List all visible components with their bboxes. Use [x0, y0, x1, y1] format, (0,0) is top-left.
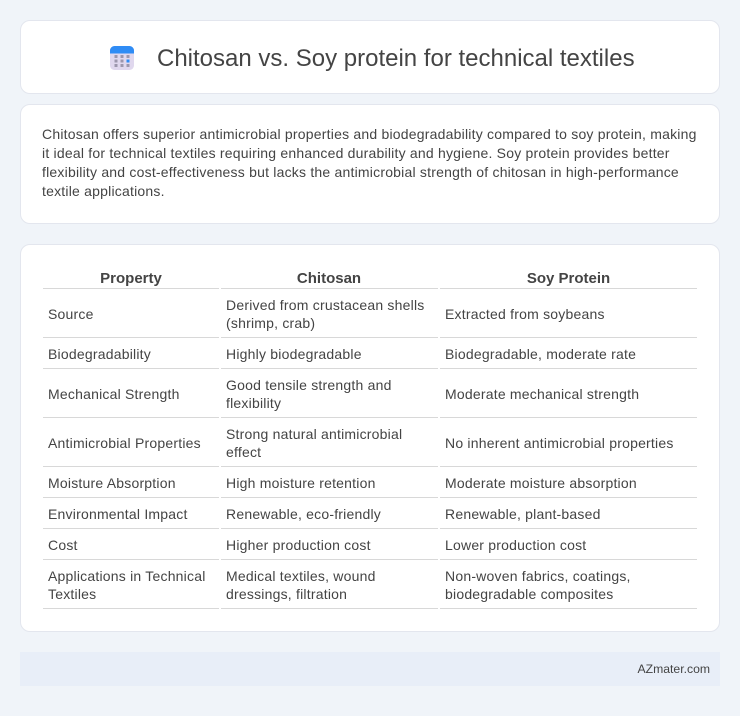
row: Applications in Technical Textiles [48, 568, 631, 602]
summary text: Chitosan offers superior antimicrobial properties and biodegradability compared to soy protein, making [42, 126, 697, 142]
row: Mechanical Strength [48, 377, 639, 411]
row: Applications in Technical Textiles: Medical textiles, wound [226, 568, 376, 584]
row: Environmental Impact [48, 506, 601, 522]
row: Biodegradability: Highly biodegradable [226, 346, 362, 362]
row: Biodegradability: Biodegradability [48, 346, 151, 362]
icon: calendar [110, 46, 134, 70]
row: Moisture Absorption: Moderate moisture absorption [445, 475, 637, 491]
row: Applications in Technical Textiles: Textiles [48, 586, 96, 602]
row: Applications in Technical Textiles: Non-woven fabrics, coatings, [445, 568, 631, 584]
title: Chitosan vs. Soy protein for technical textiles [157, 45, 635, 72]
footer text: AZmater.com [638, 662, 710, 676]
row: Moisture Absorption: Moisture Absorption [48, 475, 176, 491]
row: Antimicrobial Properties [48, 426, 674, 460]
row: Biodegradability: Biodegradable, moderate rate [445, 346, 636, 362]
footer bar [20, 652, 720, 686]
row: Environmental Impact: Renewable, eco-friendly [226, 506, 381, 522]
row: Antimicrobial Properties: Strong natural antimicrobial [226, 426, 402, 442]
panel: title card [20, 20, 720, 94]
comparison table [43, 270, 697, 609]
row: Cost: Higher production cost [226, 537, 371, 553]
row: Antimicrobial Properties: No inherent antimicrobial properties [445, 435, 674, 451]
row: Cost: Lower production cost [445, 537, 586, 553]
row: Applications in Technical Textiles: Applications in Technical [48, 568, 206, 584]
row: Cost: Cost [48, 537, 78, 553]
row: Antimicrobial Properties: Antimicrobial Properties [48, 435, 201, 451]
row: Moisture Absorption [48, 475, 637, 491]
column header: Soy Protein: Soy Protein [527, 270, 610, 287]
row: Antimicrobial Properties: effect [226, 444, 261, 460]
row: Source: Source [48, 306, 94, 322]
row: Source: (shrimp, crab) [226, 315, 315, 331]
row: Source [48, 297, 605, 331]
column header: Chitosan: Chitosan [297, 270, 361, 287]
row: Applications in Technical Textiles: dressings, filtration [226, 586, 347, 602]
row: Mechanical Strength: Good tensile strength and [226, 377, 392, 393]
row: Biodegradability [48, 346, 636, 362]
row: Moisture Absorption: High moisture retention [226, 475, 376, 491]
summary text: it ideal for technical textiles requiring enhanced durability and hygiene. Soy protein provides better [42, 145, 670, 161]
panel: comparison table card [20, 244, 720, 632]
summary text [42, 126, 697, 199]
row: Mechanical Strength: flexibility [226, 395, 281, 411]
summary text: flexibility and cost-effectiveness but lacks the antimicrobial strength of chitosan in high-performance [42, 164, 679, 180]
row: Source: Derived from crustacean shells [226, 297, 424, 313]
row: Mechanical Strength: Moderate mechanical strength [445, 386, 639, 402]
row: Mechanical Strength: Mechanical Strength [48, 386, 180, 402]
row: Source: Extracted from soybeans [445, 306, 605, 322]
row: Applications in Technical Textiles: biodegradable composites [445, 586, 613, 602]
row: Cost [48, 537, 586, 553]
row: Environmental Impact: Environmental Impact [48, 506, 188, 522]
summary text: textile applications. [42, 183, 165, 199]
column header: Property: Property [100, 270, 162, 287]
panel: summary card [20, 104, 720, 224]
row: Environmental Impact: Renewable, plant-based [445, 506, 601, 522]
